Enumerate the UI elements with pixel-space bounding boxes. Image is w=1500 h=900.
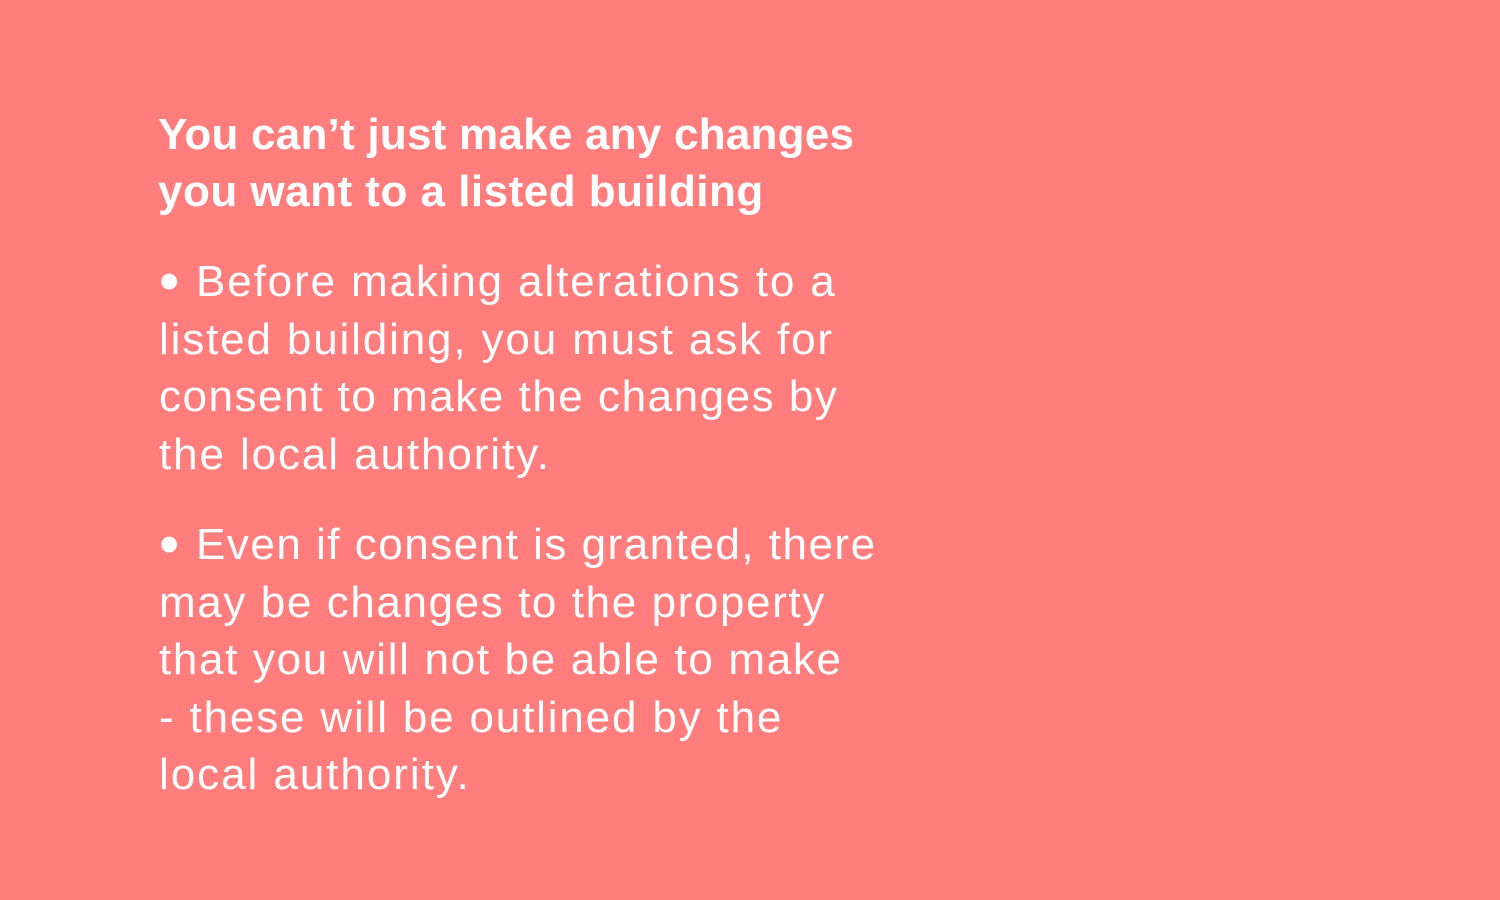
text block: restrictions paragraph: may be changes to the property [159, 578, 826, 627]
title [158, 110, 854, 216]
text block: consent paragraph: • [159, 249, 179, 314]
text block: consent paragraph: Before making alterations to a [196, 257, 837, 306]
title: you want to a listed building [158, 167, 764, 216]
text block: consent paragraph: listed building, you must ask for [159, 315, 834, 364]
text block: restrictions paragraph [159, 512, 877, 799]
text block: restrictions paragraph: - these will be outlined by the [159, 693, 783, 742]
title: You can’t just make any changes [158, 110, 854, 159]
text block: restrictions paragraph: Even if consent is granted, there [196, 520, 877, 569]
text block: restrictions paragraph: • [159, 512, 179, 577]
text block: consent paragraph: consent to make the changes by [159, 372, 838, 421]
text block: restrictions paragraph: local authority. [159, 750, 471, 799]
text block: consent paragraph [159, 249, 838, 479]
text block: consent paragraph: the local authority. [159, 430, 551, 479]
text block: restrictions paragraph: that you will not be able to make [159, 635, 843, 684]
